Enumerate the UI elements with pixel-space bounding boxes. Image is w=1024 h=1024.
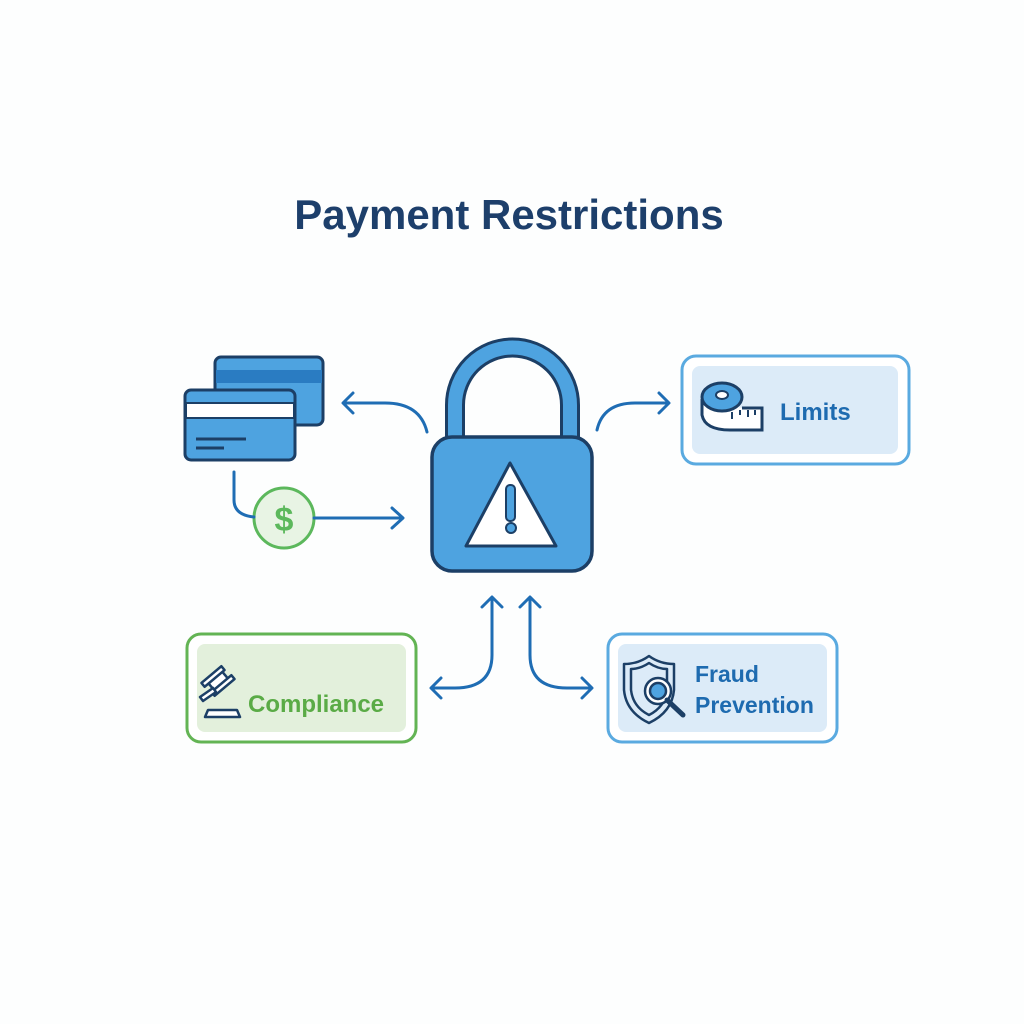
panel: fraud prevention: Prevention [695,692,814,718]
panel: compliance: Compliance [248,691,384,718]
title: Payment Restrictions [294,191,724,238]
icon: credit cards [185,357,323,460]
icon: dollar coin [254,488,314,548]
icon: tape measure [702,383,762,430]
panel: fraud prevention [608,634,837,742]
icon: shield with magnifier [624,656,683,723]
icon: gavel [200,666,240,717]
arrow: cards to coin to lock [234,472,403,528]
panel: limits: Limits [780,399,851,426]
arrow: lock to limits [597,393,669,430]
arrow: lock to compliance [431,597,502,698]
arrow: lock to fraud prevention [520,597,592,698]
icon: padlock with warning [432,348,592,571]
panel: limits [682,356,909,464]
icon: dollar coin: $ [275,501,294,539]
panel: fraud prevention: Fraud [695,661,759,687]
arrow: lock to cards [343,393,427,432]
panel: compliance [187,634,416,742]
